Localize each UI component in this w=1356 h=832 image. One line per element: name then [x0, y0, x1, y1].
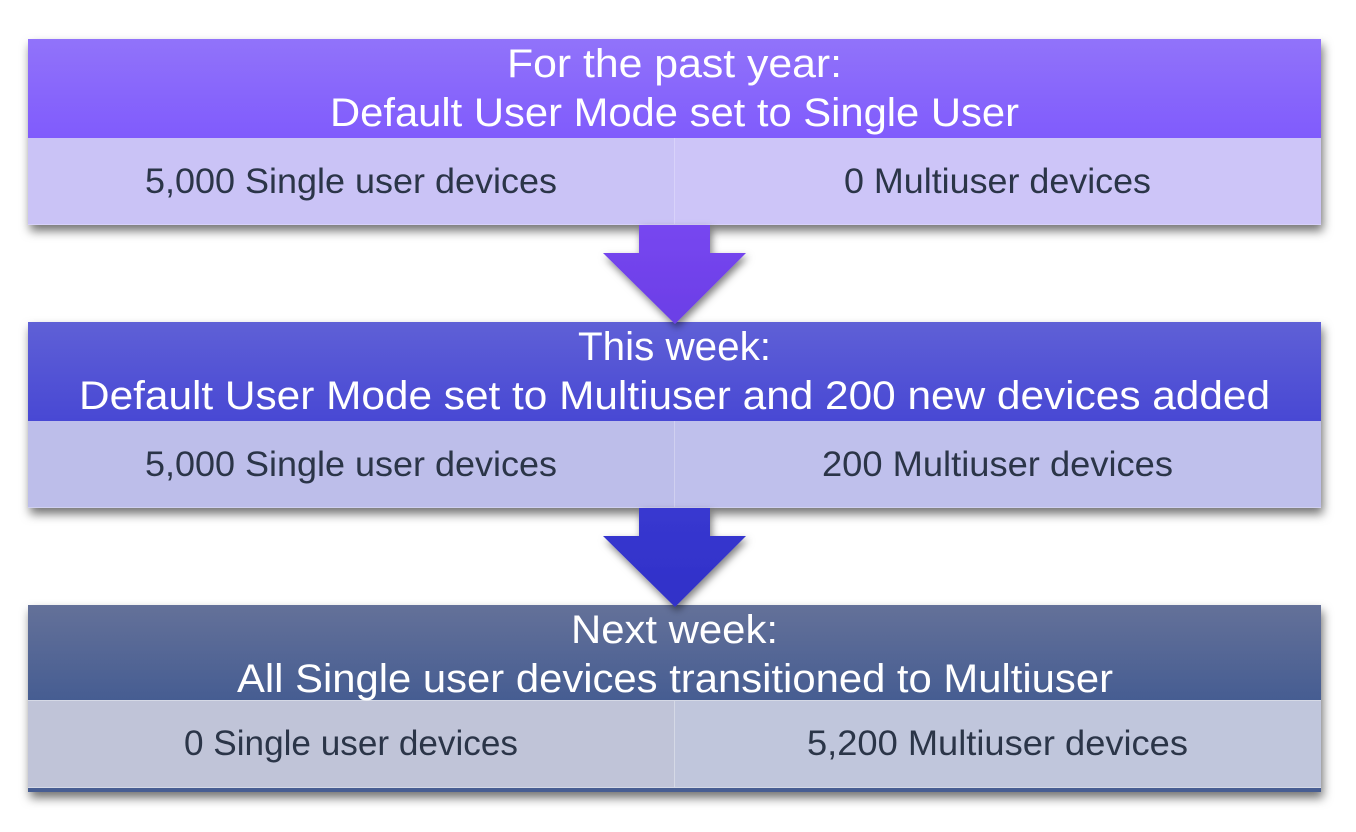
cell: 0 multiuser devices: 0 Multiuser devices [844, 162, 1151, 201]
heading: next week: All Single user devices transitioned to Multiuser [237, 657, 1113, 701]
arrow: this week to next week [603, 508, 746, 607]
heading: past year: For the past year: [507, 42, 842, 86]
cell: 200 multiuser devices [675, 421, 1321, 507]
arrow: past year to this week [603, 225, 746, 324]
heading: this week: Default User Mode set to Multiuser and 200 new devices added [79, 374, 1270, 418]
cell: 200 multiuser devices: 200 Multiuser devices [822, 445, 1173, 484]
cell divider band [28, 700, 1321, 788]
cell: 0 single user devices: 0 Single user devices [184, 724, 518, 763]
cell: 5,000 single user devices: 5,000 Single user devices [145, 445, 557, 484]
heading: next week: Next week: [571, 608, 778, 652]
heading: next week [237, 608, 1113, 701]
heading: past year: Default User Mode set to Single User [330, 91, 1019, 135]
panel: for the past year [28, 39, 1321, 225]
cell: 5,000 single user devices [28, 138, 674, 224]
cell: 5,000 single user devices: 5,000 Single user devices [145, 162, 557, 201]
panel: this week [28, 322, 1321, 508]
cell: 5,200 multiuser devices [675, 701, 1321, 787]
header band: past year [28, 39, 1321, 138]
heading: this week: This week: [578, 325, 771, 369]
cell: 5,200 multiuser devices: 5,200 Multiuser devices [807, 724, 1188, 763]
cell: 0 multiuser devices [675, 138, 1321, 224]
panel: next week [28, 605, 1321, 792]
cell: 0 single user devices [28, 701, 674, 787]
heading: past year [330, 42, 1019, 135]
header band: next week [28, 605, 1321, 700]
header band: this week [28, 322, 1321, 421]
cell: 5,000 single user devices [28, 421, 674, 507]
heading: this week [79, 325, 1270, 418]
